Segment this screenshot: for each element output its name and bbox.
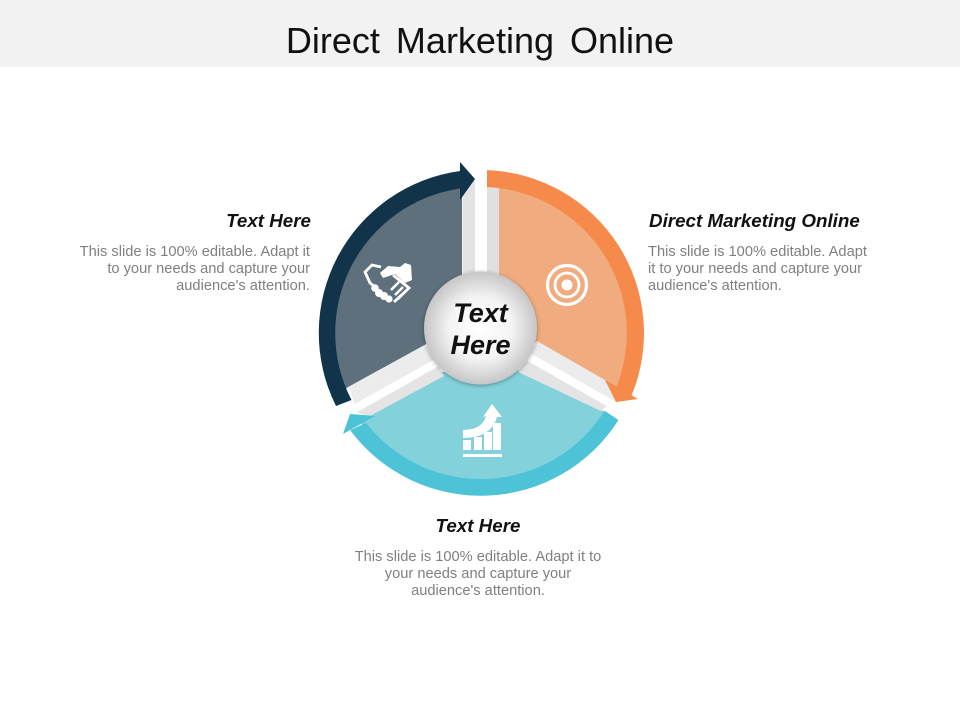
arrow ring: orange <box>487 170 644 402</box>
hub label: Here <box>450 330 511 360</box>
separator: lower left <box>346 345 444 417</box>
left heading: Text Here <box>226 210 311 231</box>
hub label <box>450 298 511 360</box>
bottom heading: Text Here <box>436 515 520 536</box>
icon: handshake <box>365 263 412 303</box>
icon: target <box>548 266 586 304</box>
separator: lower right <box>518 341 616 411</box>
right body <box>648 244 867 294</box>
hub circle <box>424 272 537 384</box>
text block: bottom <box>355 515 601 599</box>
left body: This slide is 100% editable. Adapt it <box>80 244 310 260</box>
icon: growth chart <box>463 404 502 457</box>
right body: it to your needs and capture your <box>648 261 862 277</box>
bottom body <box>355 549 601 599</box>
separator: top <box>462 170 499 276</box>
right body: This slide is 100% editable. Adapt <box>648 244 867 260</box>
sector: light cyan <box>360 370 608 483</box>
left body: audience's attention. <box>176 278 310 294</box>
text block: left <box>80 210 311 294</box>
title band <box>0 0 960 67</box>
arrow ring: cyan <box>343 411 618 496</box>
left body: to your needs and capture your <box>107 261 310 277</box>
arrow ring: dark navy <box>319 162 475 406</box>
title: Direct Marketing Online <box>286 20 674 61</box>
sector: peach <box>499 184 630 390</box>
bottom body: audience's attention. <box>411 583 545 599</box>
bottom body: This slide is 100% editable. Adapt it to <box>355 549 601 565</box>
bottom body: your needs and capture your <box>385 566 571 582</box>
text block: right <box>648 210 867 294</box>
sector: dark slate <box>331 184 462 390</box>
left body <box>80 244 310 294</box>
right body: audience's attention. <box>648 278 782 294</box>
right heading: Direct Marketing Online <box>649 210 860 231</box>
hub label: Text <box>453 298 508 328</box>
